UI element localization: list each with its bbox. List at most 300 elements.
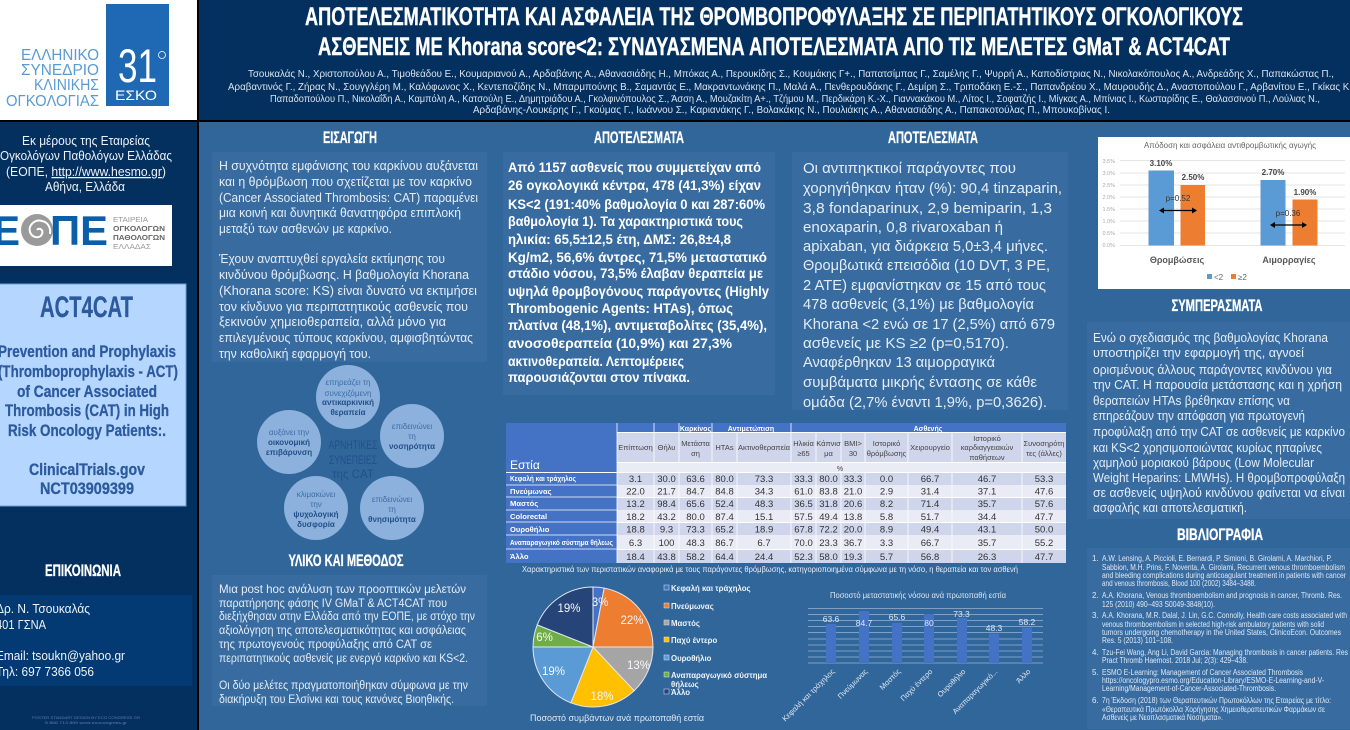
panel: references: Pract Thromb Haemost. 2018 Jul; 2(3): 429–438. <box>1102 656 1248 665</box>
panel: references: 6. <box>1092 696 1099 705</box>
panel: results text 1: KS<2 (191:40% βαθμολογία 0 και 287:60% <box>508 197 765 212</box>
EOPE logo: ΠΑΘΟΛΟΓΩΝ <box>113 235 165 242</box>
y axis ticks: 0.0% <box>1102 243 1115 249</box>
panel: references: 125 (2010) 490–493 S0049-3848(10). <box>1102 600 1215 609</box>
bar chart: metastatic disease by primary site: 58.2 <box>1019 617 1036 627</box>
bar chart: metastatic disease by primary site: Αναπαραγωγικό... <box>951 667 999 716</box>
panel: methods text: παρατήρησης φάσης IV GMaT & ACT4CAT που <box>219 596 447 610</box>
pie chart: events by primary site: 22% <box>620 615 644 627</box>
circle: treatment: αντικαρκινική <box>322 398 374 407</box>
y axis ticks: 0.5% <box>1102 231 1115 237</box>
ACT4CAT box: of Cancer Associated <box>17 382 157 401</box>
table row: head and neck: 46.7 <box>978 474 996 485</box>
panel: methods text <box>212 575 487 706</box>
panel: references: 3. <box>1092 611 1099 620</box>
table row: breast: 57.6 <box>1035 499 1053 510</box>
pie chart: events by primary site <box>533 587 653 707</box>
panel: results text 2: Οι αντιπηκτικοί παράγοντες που <box>803 160 1016 177</box>
panel: introduction text: μεταξύ των ασθενών με καρκίνο. <box>219 221 392 236</box>
panel: references: 4. <box>1092 648 1099 657</box>
table row: colorectal: 34.4 <box>978 512 996 523</box>
circle: morbidity <box>380 404 444 468</box>
chart title: Απόδοση και ασφάλεια αντιθρομβωτικής αγωγής <box>1144 141 1316 150</box>
heading: references: ΒΙΒΛΙΟΓΡΑΦΙΑ <box>1177 525 1263 544</box>
heading: results 2: ΑΠΟΤΕΛΕΣΜΑΤΑ <box>888 128 978 147</box>
bar chart: metastatic disease by primary site: 73.3 <box>953 609 970 619</box>
panel: results text 1: παρουσιάζονται στον πίνακα. <box>508 370 690 385</box>
footer small print <box>32 716 141 725</box>
table row: urothelial <box>626 524 1053 536</box>
panel: results text 1: Kg/m2, 56,6% άντρες, 71,5% μεταστατικό <box>508 250 767 265</box>
table row: breast: 8.2 <box>880 499 893 510</box>
ACT4CAT box: ACT4CAT <box>40 291 133 324</box>
y axis ticks: 2.0% <box>1102 195 1115 201</box>
table column headers: καρδιαγγειακών <box>961 443 1014 452</box>
panel: results text 2: enoxaparin, 0,8 rivaroxaban ή <box>803 219 1003 236</box>
ACT4CAT box: Risk Oncology Patients:. <box>8 421 166 440</box>
table row: breast: 98.4 <box>657 499 676 510</box>
table row labels: Ουροθήλιο <box>510 525 550 534</box>
contact details: Email: tsoukn@yahoo.gr <box>0 649 125 663</box>
table column headers: Επίπτωση <box>618 443 653 452</box>
table row: lung: 83.8 <box>819 486 838 498</box>
bar chart: metastatic disease by primary site: Άλλο <box>1014 667 1032 685</box>
bar chart: metastatic disease by primary site: Μαστός <box>878 667 903 692</box>
ACT4CAT box: Thrombosis (CAT) in High <box>5 401 169 420</box>
bar chart: metastatic disease by primary site <box>780 590 1043 723</box>
table row: breast: 36.5 <box>794 499 813 510</box>
diagram centre label: της CAT <box>332 469 374 481</box>
p-value arrows <box>1159 194 1307 228</box>
table row: other: 58.0 <box>819 552 838 563</box>
table row: female reproductive: 48.3 <box>686 538 705 549</box>
table row: female reproductive: 35.7 <box>978 538 996 549</box>
table column headers: Εστία <box>510 458 540 472</box>
panel: results text 2: ομάδα (2,7% έναντι 1,9%, p=0,3626). <box>803 394 1047 411</box>
y axis ticks: 1.5% <box>1102 207 1115 213</box>
y axis ticks: 2.5% <box>1102 183 1115 189</box>
affiliation text <box>0 134 172 194</box>
panel: header <box>199 0 1350 120</box>
contact details <box>0 595 192 686</box>
table row: urothelial: 49.4 <box>921 524 939 536</box>
table row: female reproductive: 70.0 <box>794 538 813 549</box>
panel: methods text: Οι δύο μελέτες πραγματοποιήθηκαν σύμφωνα με την <box>219 678 468 692</box>
table column headers: Ηλικία <box>793 439 814 448</box>
panel: conclusions text: θεραπειών HTAs βρέθηκαν επίσης να <box>1093 393 1290 408</box>
panel: conference logo: ΕΣΚΟ <box>115 87 157 103</box>
panel: conclusions text: ορισμένους άλλους παράγοντες κινδύνου για <box>1093 362 1332 377</box>
table row: breast: 13.2 <box>626 499 645 510</box>
table row: colorectal <box>626 512 1053 523</box>
table row: colorectal: 47.7 <box>1035 512 1053 523</box>
panel: methods text: της πρωτογενούς προφύλαξης από CAT σε <box>219 637 433 651</box>
table row: head and neck: 80.0 <box>819 474 838 485</box>
table row: head and neck: 63.6 <box>686 474 705 485</box>
table row labels: Colorectal <box>510 512 547 521</box>
table row: lung: 84.8 <box>715 486 734 498</box>
panel: conference logo: ΕΛΛΗΝΙΚΟ <box>21 47 99 64</box>
table row: breast: 71.4 <box>921 499 939 510</box>
panel: introduction text: και η θρόμβωση που σχετίζεται με τον καρκίνο <box>219 174 472 189</box>
authors: Αραβαντινός Γ., Ζήρας Ν., Σουγγλέρη Μ., Καλόφωνος Χ., Κεντεποζίδης Ν., Μπαρμπούνης Β., Σαμαντάς Ε., Μακραντωνάκης Π., Μαλά Α., Πενθερουδάκης Γ., Δεμίρη Σ., Τριποδάκη Ε.-Σ., Παπανδρέου Χ., Μαυρουδής Δ., Αναστοπούλου Γ., Αρβανίτου Ε., Γκίκας Κ. <box>228 81 1350 93</box>
pie legend: Κεφαλή και τράχηλος <box>671 584 751 593</box>
pie legend: Άλλο <box>671 688 690 697</box>
table row: female reproductive: 36.7 <box>844 538 862 549</box>
ACT4CAT box <box>0 284 186 506</box>
table row: colorectal: 43.2 <box>657 512 676 523</box>
panel: introduction text: την καθολική εφαρμογή του. <box>219 346 371 361</box>
table row: urothelial: 43.1 <box>978 524 996 536</box>
table column headers: Κάπνισ <box>816 439 841 448</box>
title <box>305 3 1243 61</box>
table row: head and neck: 66.7 <box>921 474 939 485</box>
pie legend: Παχύ έντερο <box>671 636 717 645</box>
table column headers: θρόμβωσης <box>867 449 907 458</box>
table row: other: 26.3 <box>978 552 996 563</box>
chart legend <box>1207 273 1247 282</box>
table row: urothelial: 50.0 <box>1035 524 1053 536</box>
table row labels: Αναπαραγωγικό σύστημα θήλεως <box>510 538 613 547</box>
bar chart: metastatic disease by primary site: Ποσοστό μεταστατικής νόσου ανά πρωτοπαθή εστία <box>830 590 1006 600</box>
pie chart: events by primary site: 19% <box>542 666 565 678</box>
circle: treatment: συνεχιζόμενη <box>325 389 371 398</box>
panel: methods text: περιπατητικούς ασθενείς με ενεργό καρκίνο και KS<2. <box>219 651 468 665</box>
category labels: Αιμορραγίες <box>1262 255 1316 265</box>
table row: female reproductive: 100 <box>659 538 674 549</box>
table row: lung: 61.0 <box>794 486 813 498</box>
table row: lung: 31.4 <box>921 486 939 498</box>
panel: references: Learning/Management-of-Cancer-Associated-Thrombosis. <box>1102 684 1276 693</box>
circle: financial burden: επιβάρυνση <box>266 448 312 457</box>
panel: references: 1. <box>1092 554 1099 563</box>
diagram centre label: ΣΥΝΕΠΕΙΕΣ <box>329 455 377 467</box>
table row: colorectal: 57.5 <box>794 512 813 523</box>
table row: head and neck <box>629 474 1053 485</box>
table column headers: Συνοσηρότη <box>1024 439 1064 448</box>
panel: conclusions text <box>1087 322 1350 519</box>
pie chart: events by primary site: 3% <box>592 597 608 609</box>
panel: methods text: διεξήχθησαν στην Ελλάδα από την ΕΟΠΕ, με στόχο την <box>219 609 475 623</box>
panel: methods text: Μια post hoc ανάλυση των προοπτικών μελετών <box>219 582 466 596</box>
table row: female reproductive <box>629 538 1053 549</box>
EOPE logo <box>0 205 172 266</box>
table row: breast: 52.4 <box>715 499 734 510</box>
table row: urothelial: 18.8 <box>626 524 645 536</box>
bar chart: metastatic disease by primary site: 65.6 <box>889 612 906 622</box>
pie legend: Μαστός <box>671 619 700 628</box>
circle: psychological distress: κλιμακώνει <box>297 490 335 499</box>
table row: other: 19.3 <box>844 552 862 563</box>
table row labels <box>510 474 613 561</box>
panel: introduction text: τον κίνδυνο για περιπατητικούς ασθενείς που <box>219 299 468 314</box>
footer small print: 5 866 713 869 www.ecocongress.gr <box>45 721 128 725</box>
pie chart: events by primary site: 6% <box>536 632 553 644</box>
bars <box>1148 170 1318 246</box>
table row: breast <box>626 499 1053 510</box>
panel: conclusions text: επηρεάζουν την απόφαση για πρωτογενή <box>1093 408 1305 423</box>
bar chart: metastatic disease by primary site: Ουροθήλιο <box>935 667 967 699</box>
circle: financial burden: οικονομική <box>268 438 310 447</box>
table row: lung: 2.9 <box>880 486 893 498</box>
table row: urothelial: 18.9 <box>755 524 773 536</box>
table row: other: 52.3 <box>794 552 813 563</box>
circle: financial burden: αυξάνει την <box>269 428 309 437</box>
y axis ticks: 3.5% <box>1102 159 1115 165</box>
table column headers: Ακτινοθεραπεία <box>738 443 791 452</box>
panel: introduction text: Η συχνότητα εμφάνισης του καρκίνου αυξάνεται <box>219 158 478 173</box>
diagram centre label: ΑΡΝΗΤΙΚΕΣ <box>328 440 378 452</box>
panel: results text 1: ηλικία: 65,5±12,5 έτη, ΔΜΣ: 26,8±4,8 <box>508 232 731 247</box>
table row: other: 56.8 <box>921 552 939 563</box>
table column headers: HTAs <box>715 443 734 452</box>
authors: Αρδαβάνης-Λουκέρης Γ., Γκούμας Γ., Ιωάννου Σ., Καριανάκης Γ., Βολακάκης Ν., Πουλιάκης Α., Αθανασιάδης Α., Παπακοτούλας Π., Μπουκοβίνας Ι. <box>473 104 1110 116</box>
authors <box>228 68 1350 116</box>
table row: breast: 65.6 <box>686 499 705 510</box>
pie legend: Πνεύμωνας <box>671 602 714 611</box>
bar chart: metastatic disease by primary site: 84.7 <box>856 618 873 628</box>
panel: introduction text: (Cancer Associated Thrombosis: CAT) παραμένει <box>219 190 478 205</box>
affiliation text: (ΕΟΠΕ, http://www.hesmo.gr) <box>6 165 166 179</box>
table row: female reproductive: 66.7 <box>921 538 939 549</box>
table row: colorectal: 87.4 <box>715 512 734 523</box>
table row labels: Μαστός <box>510 499 538 508</box>
pie caption: Ποσοστό συμβάντων ανά πρωτοπαθή εστία <box>530 713 704 724</box>
table row: colorectal: 18.2 <box>626 512 645 523</box>
panel: introduction text: Έχουν αναπτυχθεί εργαλεία εκτίμησης του <box>218 251 445 266</box>
table group headers: Ασθενής <box>914 426 943 433</box>
pie legend: Αναπαραγωγικό σύστημα <box>671 671 767 680</box>
table row: head and neck: 73.3 <box>755 474 773 485</box>
table row: head and neck: 33.3 <box>844 474 862 485</box>
bar values: 2.70% <box>1262 168 1284 177</box>
panel: introduction text: μια κοινή και δυνητικά θανατηφόρα επιπλοκή <box>219 205 461 220</box>
panel: results text 1 <box>503 152 775 395</box>
panel: conference logo: ΣΥΝΕΔΡΙΟ <box>21 62 99 79</box>
table row: breast: 35.7 <box>978 499 996 510</box>
table column headers: μα <box>824 449 833 458</box>
table row: head and neck: 30.0 <box>657 474 676 485</box>
category labels <box>1150 255 1316 265</box>
panel: left sidebar <box>0 122 197 730</box>
table row: colorectal: 51.7 <box>921 512 939 523</box>
bar chart: metastatic disease by primary site: Παχύ έντερο <box>899 667 934 703</box>
circle: mortality: τη <box>388 505 396 514</box>
panel: results text 2: συμβάματα μικρής έντασης σε κάθε <box>803 374 1037 391</box>
diagram centre label <box>328 440 378 481</box>
panel: conclusions text: ασφαλής και αποτελεσματική. <box>1093 500 1247 515</box>
panel: results text 2: Θρομβωτικά επεισόδια (10 DVT, 3 PE, <box>803 257 1050 274</box>
bar chart: metastatic disease by primary site: Πνεύμωνας <box>836 667 870 701</box>
table: characteristics by site <box>506 423 1066 563</box>
heading: conclusions: ΣΥΜΠΕΡΑΣΜΑΤΑ <box>1172 296 1262 315</box>
table row: other: 24.4 <box>755 552 773 563</box>
table row: female reproductive: 3.3 <box>880 538 893 549</box>
panel: results text 2: 3,8 fondaparinux, 2,9 bemiparin, 1,3 <box>803 200 1052 217</box>
panel: conference logo: ΟΓΚΟΛΟΓΙΑΣ <box>6 93 99 110</box>
table row: female reproductive: 23.3 <box>819 538 838 549</box>
table row: urothelial: 8.9 <box>880 524 893 536</box>
panel: results text 1: ανοσοθεραπεία (10,9%) και 27,3% <box>508 336 732 351</box>
panel: results text 1: στάδιο νόσου, 73,5% έλαβαν θεραπεία με <box>508 266 764 281</box>
table row: lung: 34.3 <box>755 486 773 498</box>
table row: head and neck: 33.3 <box>794 474 813 485</box>
ACT4CAT box: (Thromboprophylaxis - ACT) <box>0 362 178 381</box>
table caption: Χαρακτηριστικά των περιστατικών αναφορικά με τους παράγοντες θρόμβωσης, κατηγοριοποιημένα σύμφωνα με τη νόσο, η θεραπεία και τον ασθενή <box>522 565 1018 574</box>
table row: head and neck: 3.1 <box>629 474 642 485</box>
bar values <box>1150 159 1316 197</box>
circle: treatment <box>316 365 380 429</box>
EOPE logo: ΟΓΚΟΛΟΓΩΝ <box>113 226 165 233</box>
table row: urothelial: 73.3 <box>686 524 705 536</box>
panel: introduction text: κινδύνου θρόμβωσης. Η βαθμολογία Khorana <box>219 267 470 282</box>
panel: introduction text: επιλεγμένους τύπους καρκίνου, αμφισβητώντας <box>219 330 473 345</box>
table group headers: Καρκίνος <box>680 426 711 433</box>
diagram: negative consequences of CAT <box>257 365 444 540</box>
pie chart: events by primary site: 18% <box>590 691 614 703</box>
affiliation text: Εκ μέρους της Εταιρείας <box>22 134 150 148</box>
table row: head and neck: 53.3 <box>1035 474 1053 485</box>
panel: conference logo: 31 <box>118 39 157 92</box>
table group headers: Αντιμετώπιση <box>728 426 774 433</box>
circle: psychological distress: την <box>310 500 322 509</box>
panel: references: ESMO E-Learning: Management of Cancer Associated Thrombosis <box>1102 668 1303 677</box>
panel: results text 2: χορηγήθηκαν ήταν (%): 90,4 tinzaparin, <box>803 180 1062 197</box>
panel: conference logo: ΚΛΙΝΙΚΗΣ <box>34 77 99 94</box>
table row: urothelial: 67.8 <box>794 524 813 536</box>
table row: urothelial: 20.0 <box>844 524 862 536</box>
panel: results text 2: Khorana <2 ενώ σε 17 (2,5%) από 679 <box>803 316 1055 333</box>
table row: female reproductive: 6.7 <box>757 538 771 549</box>
ACT4CAT box: Prevention and Prophylaxis <box>0 342 176 361</box>
bar values: 3.10% <box>1150 159 1172 168</box>
y axis ticks <box>1102 159 1115 249</box>
pie legend: θήλεως <box>671 680 699 689</box>
panel: results text 1: Thrombogenic Agents: HTAs), όπως <box>508 301 733 316</box>
panel: results text 1: Από 1157 ασθενείς που συμμετείχαν από <box>508 160 761 175</box>
panel: introduction text: (Khorana score: KS) είναι δυνατό να εκτιμήσει <box>219 283 477 298</box>
panel: conclusions text: χαμηλού μοριακού βάρους (Low Molecular <box>1093 455 1315 470</box>
panel: methods text: διακήρυξη του Ελσίνκι και τους κανόνες Βιοηθικής. <box>219 692 454 706</box>
category labels: Θρομβώσεις <box>1150 255 1204 265</box>
table row: lung: 21.0 <box>844 486 862 498</box>
panel: results text 2 <box>792 152 1068 411</box>
panel: references: Res. 5 (2013) 101–108. <box>1102 636 1173 645</box>
panel: results text 2: ασθενείς με KS ≥2 (p=0,5170). <box>803 335 1009 352</box>
table row: colorectal: 49.4 <box>819 512 838 523</box>
affiliation text: Αθήνα, Ελλάδα <box>45 180 125 194</box>
ACT4CAT box: NCT03909399 <box>40 479 134 498</box>
chart legend: ≥2 <box>1238 273 1247 282</box>
circle: mortality: επιδεινώνει <box>372 495 412 504</box>
affiliation text: Ογκολόγων Παθολόγων Ελλάδας <box>0 149 172 163</box>
panel: results text 2: Αναφέρθηκαν 13 αιμορραγικά <box>803 354 995 371</box>
table column headers: % <box>837 466 843 473</box>
table row: other: 43.8 <box>657 552 676 563</box>
panel: main background <box>199 122 1350 730</box>
panel: results text 1: βαθμολογία 1). Τα χαρακτηριστικά τους <box>508 214 743 229</box>
bar values: 1.90% <box>1294 188 1316 197</box>
circle: morbidity: νοσηρότητα <box>389 442 435 451</box>
panel: results text 1: 26 ογκολογικά κέντρα, 478 (41,3%) είχαν <box>508 178 761 193</box>
table column headers: τες (άλλες) <box>1026 449 1062 458</box>
y axis ticks: 3.0% <box>1102 171 1115 177</box>
circle: morbidity: τη <box>408 432 416 441</box>
EOPE logo: ΠΕ <box>50 207 108 254</box>
circle: psychological distress: δυσφορία <box>297 520 335 529</box>
table row: breast: 31.8 <box>819 499 838 510</box>
bar values: 2.50% <box>1182 173 1204 182</box>
EOPE logo: ΕΛΛΑΔΑΣ <box>113 244 152 251</box>
footer small print: POSTER STANDART DESIGN BY ECO CONGRESS GR <box>32 716 141 720</box>
table column headers: 30 <box>849 449 857 458</box>
panel: introduction text <box>212 152 487 362</box>
circle: financial burden <box>257 410 321 474</box>
table row labels: Πνεύμωνας <box>510 487 552 496</box>
table row: colorectal: 15.1 <box>755 512 773 523</box>
table row: lung: 37.1 <box>978 486 996 498</box>
panel: results text 1: ακτινοθεραπεία. Λεπτομέρειες <box>508 354 684 369</box>
panel: references: Ασθενείς με Νεοπλασματικά Νοσήματα». <box>1102 713 1223 722</box>
panel: results text 2: 2 ATE) εμφανίστηκαν σε 15 από τους <box>803 277 1046 294</box>
panel: results text 2: 478 ασθενείς (3,1%) με βαθμολογία <box>803 296 1034 313</box>
table row: head and neck: 80.0 <box>715 474 734 485</box>
table row: other: 5.7 <box>880 552 893 563</box>
bar chart: metastatic disease by primary site: 63.6 <box>823 614 840 624</box>
authors: Τσουκαλάς Ν., Χριστοπούλου Α., Τιμοθεάδου Ε., Κουμαριανού Α., Αρδαβάνης Α., Αθανασιάδης Η., Μπόκας Α., Περουκίδης Σ., Κουμάκης Γ+., Παπατσίμπας Γ., Σαμέλης Γ., Ψυρρή Α., Καποδίστριας Ν., Νικολακόπουλος Α., Ανδρεάδης Χ., Παπακώστας Π., <box>248 68 1334 80</box>
bar chart: metastatic disease by primary site: 80 <box>924 618 934 628</box>
table row: colorectal: 80.0 <box>686 512 705 523</box>
panel: references: 2. <box>1092 591 1099 600</box>
table row: colorectal: 5.8 <box>880 512 893 523</box>
panel: results text 1: υψηλά θρομβογόνους παράγοντες (Highly <box>508 284 769 299</box>
circle: mortality <box>360 476 424 540</box>
table row: colorectal: 13.8 <box>844 512 862 523</box>
table column headers: Χειρουργείο <box>910 443 950 452</box>
pie legend <box>664 584 767 697</box>
table row: female reproductive: 6.3 <box>629 538 642 549</box>
table column headers: ≥65 <box>797 449 810 458</box>
ACT4CAT box: ClinicalTrials.gov <box>29 460 145 479</box>
table row: other <box>626 552 1053 563</box>
panel: conclusions text: Ενώ ο σχεδιασμός της βαθμολογίας Khorana <box>1093 330 1329 345</box>
table row: other: 18.4 <box>626 552 645 563</box>
circle: mortality: θνησιμότητα <box>368 515 416 524</box>
table column headers: Θήλυ <box>658 443 675 452</box>
p-value arrows: p=0.52 <box>1166 194 1191 203</box>
table column headers <box>510 434 1064 473</box>
table row: breast: 20.6 <box>844 499 862 510</box>
panel: conference logo <box>0 0 197 120</box>
table row: lung: 47.6 <box>1035 486 1053 498</box>
p-value arrows: p=0.36 <box>1276 209 1301 218</box>
heading: materials and methods: ΥΛΙΚΟ ΚΑΙ ΜΕΘΟΔΟΣ <box>288 551 404 570</box>
table row: urothelial: 9.3 <box>660 524 673 536</box>
panel: methods text: αξιολόγηση της αποτελεσματικότητας και ασφάλειας <box>219 623 466 637</box>
bar chart: metastatic disease by primary site: Κεφαλή και τράχηλος <box>780 667 837 723</box>
pie chart: events by primary site: 13% <box>627 660 650 672</box>
table column headers: Ιστορικό <box>973 434 1001 443</box>
table backgrounds <box>506 423 1066 563</box>
EOPE logo: ΕΤΑΙΡΕΙΑ <box>113 217 148 224</box>
circle: morbidity: επιδεινώνει <box>392 422 432 431</box>
panel: references <box>1087 548 1350 729</box>
table row labels: Άλλο <box>510 552 529 561</box>
table row: other: 64.4 <box>715 552 734 563</box>
panel: conclusions text: και KS<2 χρησιμοποιώντας κυρίως ηπαρίνες <box>1093 440 1322 455</box>
table row: lung <box>626 486 1053 498</box>
table row: urothelial: 65.2 <box>715 524 734 536</box>
